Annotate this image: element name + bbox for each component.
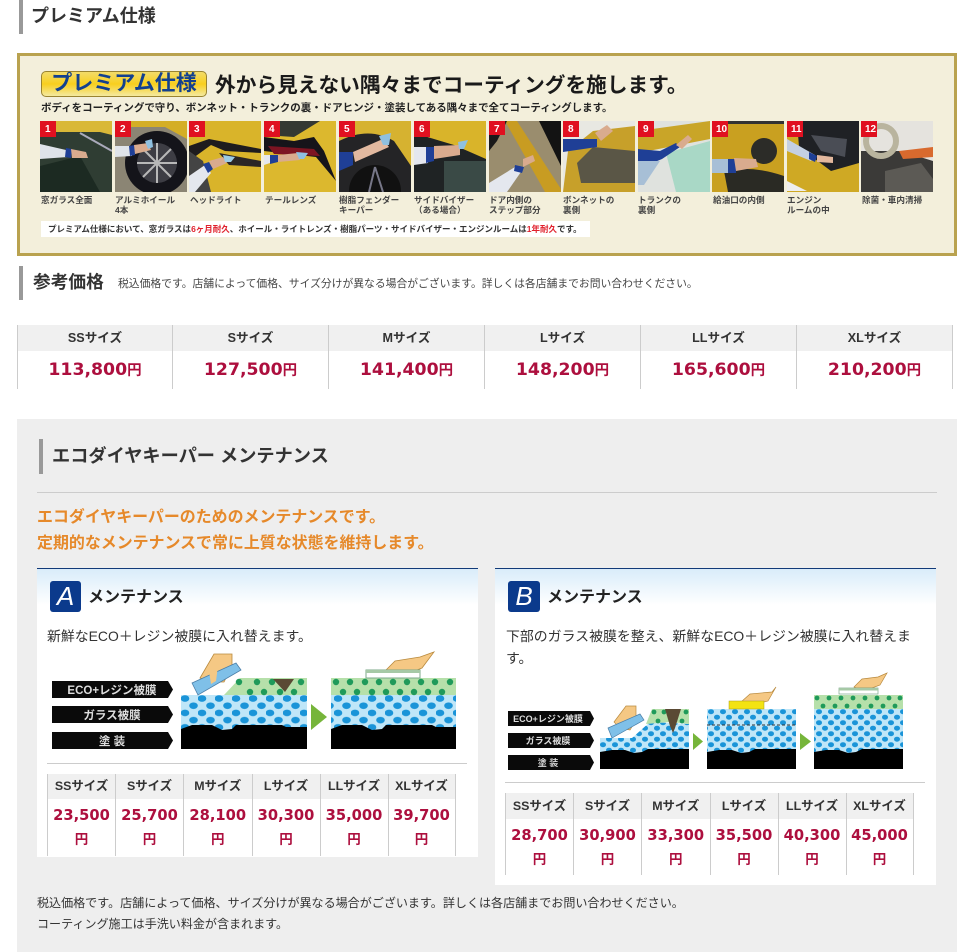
price table: maintenance B: 円 bbox=[873, 852, 886, 867]
photo 3: headlight: 3 bbox=[194, 124, 200, 135]
photo 6: side visor: 6 bbox=[419, 124, 425, 135]
photo grid: 12 coating spots bbox=[40, 121, 933, 215]
price table: maintenance B bbox=[505, 793, 914, 875]
price table: premium: 141,400円 bbox=[360, 360, 453, 380]
price table: maintenance A: 25,700 bbox=[121, 807, 178, 824]
price table: premium: SSサイズ bbox=[68, 331, 122, 345]
photo captions: 裏側 bbox=[638, 204, 656, 215]
banner durability note: プレミアム仕様において、窓ガラスは6ヶ月耐久、ホイール・ライトレンズ・樹脂パーツ・サイドバイザー・エンジンルームは1年耐久です。 bbox=[48, 224, 582, 234]
price table: maintenance A: 円 bbox=[75, 832, 88, 847]
price table: maintenance A: 円 bbox=[211, 832, 224, 847]
price table: maintenance B: Sサイズ bbox=[585, 799, 630, 813]
photo captions: アルミホイール bbox=[115, 195, 175, 205]
section lead text: 定期的なメンテナンスで常に上質な状態を維持します。 bbox=[37, 535, 434, 552]
diagram A bbox=[52, 651, 456, 749]
price table: maintenance B: Lサイズ bbox=[722, 799, 766, 813]
photo captions: ステップ部分 bbox=[489, 204, 541, 215]
badge A bbox=[50, 581, 81, 612]
labels: ガラス被膜 bbox=[526, 735, 570, 746]
price table: maintenance B: 円 bbox=[737, 852, 751, 867]
price table: premium: Mサイズ bbox=[383, 331, 430, 345]
badge A: A bbox=[57, 581, 74, 611]
section heading: エコダイヤキーパー メンテナンス bbox=[52, 446, 329, 466]
price table: maintenance A: LLサイズ bbox=[328, 779, 380, 793]
labels: ECO+レジン被膜 bbox=[67, 683, 157, 697]
price table: maintenance B: 45,000 bbox=[851, 827, 908, 844]
photo 10: fuel filler: 10 bbox=[716, 124, 728, 135]
price table: premium: Sサイズ bbox=[228, 331, 273, 345]
price table: premium: LLサイズ bbox=[692, 331, 745, 345]
hand with sponge bbox=[192, 654, 241, 695]
price table: maintenance A: 28,100 bbox=[189, 807, 246, 824]
price table: maintenance B: 40,300 bbox=[784, 827, 840, 844]
step 3 hand with pad bbox=[839, 673, 887, 694]
hand with green pad bbox=[366, 652, 434, 678]
price table: maintenance B: 円 bbox=[601, 852, 614, 867]
photo 11: engine room: 11 bbox=[791, 124, 802, 135]
photo captions: サイドバイザー bbox=[414, 195, 474, 205]
photo captions: ドア内側の bbox=[489, 194, 532, 205]
photo 7: door step: 7 bbox=[494, 124, 500, 135]
price table: maintenance B: Mサイズ bbox=[652, 799, 699, 813]
photo captions: 給油口の内側 bbox=[713, 194, 765, 205]
photo captions: （ある場合） bbox=[414, 204, 466, 215]
section heading bbox=[39, 439, 329, 474]
arrow 1 bbox=[693, 733, 703, 750]
card description B: す。 bbox=[506, 650, 532, 666]
layer block after bbox=[331, 678, 456, 749]
banner badge: プレミアム仕様: プレミアム仕様 bbox=[51, 72, 197, 95]
price table: maintenance B: 円 bbox=[533, 852, 546, 867]
price table: maintenance A: Mサイズ bbox=[194, 779, 241, 793]
green arrow bbox=[311, 704, 327, 730]
step 3 block bbox=[814, 695, 903, 769]
price table: maintenance B: SSサイズ bbox=[513, 799, 566, 813]
photo 8: bonnet underside bbox=[563, 121, 635, 192]
price table: premium: 210,200円 bbox=[828, 360, 921, 380]
price table: maintenance A: 39,700 bbox=[393, 807, 450, 824]
photo 12: cabin cleaning: 12 bbox=[865, 124, 877, 135]
price table: maintenance A: Sサイズ bbox=[127, 779, 172, 793]
price table: premium bbox=[17, 325, 953, 389]
price table: maintenance A: 円 bbox=[347, 832, 361, 847]
photo 2: wheel: 2 bbox=[120, 124, 126, 135]
price table: premium: 127,500円 bbox=[204, 360, 297, 380]
photo captions: テールレンズ bbox=[265, 194, 317, 205]
price table: maintenance A bbox=[47, 774, 456, 856]
photo 8: bonnet underside: 8 bbox=[568, 124, 574, 135]
photo 3: headlight bbox=[189, 121, 261, 192]
photo 11: engine room bbox=[787, 121, 859, 192]
photo captions: ルームの中 bbox=[787, 204, 830, 215]
photo captions: 4本 bbox=[115, 204, 129, 215]
photo captions: ボンネットの bbox=[563, 194, 614, 205]
price table: maintenance B: XLサイズ bbox=[853, 799, 906, 813]
footer note bbox=[37, 896, 684, 931]
price table: premium: 148,200円 bbox=[516, 360, 609, 380]
photo captions: ヘッドライト bbox=[190, 195, 242, 205]
photo 7: door step bbox=[489, 121, 561, 192]
price table: maintenance B: 28,700 bbox=[511, 827, 568, 844]
price table: premium: XLサイズ bbox=[848, 331, 901, 345]
panel: maintenance A bbox=[37, 568, 478, 857]
heading: 参考価格: 参考価格 bbox=[33, 272, 104, 292]
labels bbox=[52, 681, 173, 749]
price table: maintenance A: 円 bbox=[415, 832, 428, 847]
step 2 hand with yellow pad bbox=[729, 687, 776, 709]
price table: maintenance A: 23,500 bbox=[53, 807, 110, 824]
price table: maintenance B: 35,500 bbox=[716, 827, 772, 844]
heading: プレミアム仕様 bbox=[19, 0, 156, 34]
photo 9: trunk underside: 9 bbox=[643, 124, 649, 135]
photo 12: cabin cleaning bbox=[861, 121, 933, 192]
labels: 塗 装 bbox=[538, 757, 558, 768]
step 1 block bbox=[600, 709, 689, 769]
labels bbox=[508, 711, 594, 770]
photo 9: trunk underside bbox=[638, 121, 710, 192]
price table: maintenance A: Lサイズ bbox=[264, 779, 308, 793]
photo captions: トランクの bbox=[638, 195, 681, 205]
badge B bbox=[508, 581, 540, 612]
panel: maintenance B bbox=[495, 568, 936, 885]
price table: premium: 165,600円 bbox=[672, 360, 765, 380]
card title B: メンテナンス bbox=[547, 589, 643, 606]
footer note: 税込価格です。店舗によって価格、サイズ分けが異なる場合がございます。詳しくは各店舗までお問い合わせください。 bbox=[37, 896, 684, 910]
step 2 block bbox=[707, 709, 796, 769]
card description B bbox=[506, 628, 911, 666]
panel: maintenance section bbox=[17, 419, 957, 952]
badge B: B bbox=[515, 581, 533, 611]
photo captions: 樹脂フェンダー bbox=[339, 194, 399, 205]
photo captions: 裏側 bbox=[563, 204, 581, 215]
photo 5: resin fender: 5 bbox=[344, 124, 350, 135]
photo 6: side visor bbox=[414, 121, 486, 192]
photo captions: 窓ガラス全面 bbox=[41, 194, 93, 205]
price table: maintenance A: 円 bbox=[279, 832, 293, 847]
price table: maintenance A: 円 bbox=[143, 832, 156, 847]
photo 1: window glass bbox=[40, 121, 112, 192]
photo captions bbox=[41, 194, 923, 215]
footer note: コーティング施工は手洗い料金が含まれます。 bbox=[37, 917, 288, 931]
banner title: 外から見えない隅々までコーティングを施します。 bbox=[215, 74, 688, 97]
labels: 塗 装 bbox=[99, 734, 126, 748]
step 1 hand bbox=[608, 706, 644, 738]
layer block before bbox=[181, 678, 307, 749]
section lead text: エコダイヤキーパーのためのメンテナンスです。 bbox=[37, 509, 385, 526]
price table: maintenance A: 30,300 bbox=[258, 807, 314, 824]
price table: maintenance A: SSサイズ bbox=[55, 779, 108, 793]
heading: プレミアム仕様: プレミアム仕様 bbox=[31, 6, 156, 26]
photo 5: resin fender bbox=[339, 121, 411, 217]
labels: ガラス被膜 bbox=[83, 708, 141, 722]
price table: maintenance B: 円 bbox=[805, 852, 819, 867]
photo 10: fuel filler bbox=[712, 121, 784, 192]
banner durability note bbox=[41, 221, 590, 237]
price table: maintenance B: LLサイズ bbox=[786, 799, 838, 813]
photo captions: キーパー bbox=[339, 205, 373, 215]
price table: premium: 113,800円 bbox=[48, 360, 142, 380]
photo 2: wheel bbox=[115, 121, 189, 195]
labels: ECO+レジン被膜 bbox=[513, 713, 583, 724]
heading: 参考価格 bbox=[19, 266, 698, 300]
price table: maintenance B: 33,300 bbox=[647, 827, 704, 844]
card description A: 新鮮なECO＋レジン被膜に入れ替えます。 bbox=[47, 628, 312, 644]
price table: maintenance B: 30,900 bbox=[579, 827, 636, 844]
photo 4: tail lens: 4 bbox=[269, 124, 275, 135]
section lead text bbox=[37, 508, 434, 552]
photo 4: tail lens bbox=[264, 121, 336, 192]
panel: premium banner bbox=[17, 53, 957, 256]
price table: maintenance A: 35,000 bbox=[326, 807, 382, 824]
photo captions: エンジン bbox=[787, 195, 822, 205]
card description B: 下部のガラス被膜を整え、新鮮なECO＋レジン被膜に入れ替えま bbox=[506, 628, 911, 644]
arrow 2 bbox=[800, 733, 811, 750]
heading: 参考価格: 税込価格です。店舗によって価格、サイズ分けが異なる場合がございます。詳しくは各店舗までお問い合わせください。 bbox=[118, 278, 698, 290]
photo captions: 除菌・車内清掃 bbox=[862, 194, 923, 205]
banner subtitle: ボディをコーティングで守り、ボンネット・トランクの裏・ドアヒンジ・塗装してある隅々まで全てコーティングします。 bbox=[41, 103, 612, 114]
price table: maintenance A: XLサイズ bbox=[395, 779, 448, 793]
diagram B bbox=[508, 672, 903, 770]
price table: maintenance B: 円 bbox=[669, 852, 682, 867]
price table: premium: Lサイズ bbox=[540, 331, 585, 345]
card title A: メンテナンス bbox=[88, 589, 184, 606]
photo 1: window glass: 1 bbox=[45, 124, 51, 135]
